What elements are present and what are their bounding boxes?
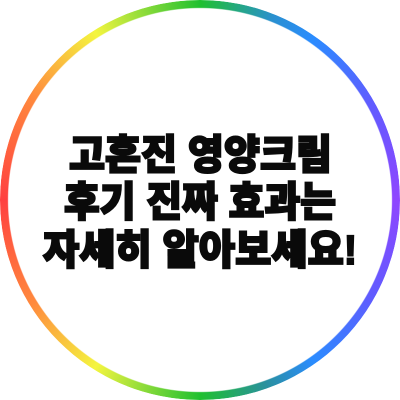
- title line 2: 후기 진짜 효과는: [64, 179, 336, 225]
- title line 1: 고혼진 영양크림: [69, 132, 332, 178]
- title line 3: 자세히 알아보세요!: [43, 227, 357, 273]
